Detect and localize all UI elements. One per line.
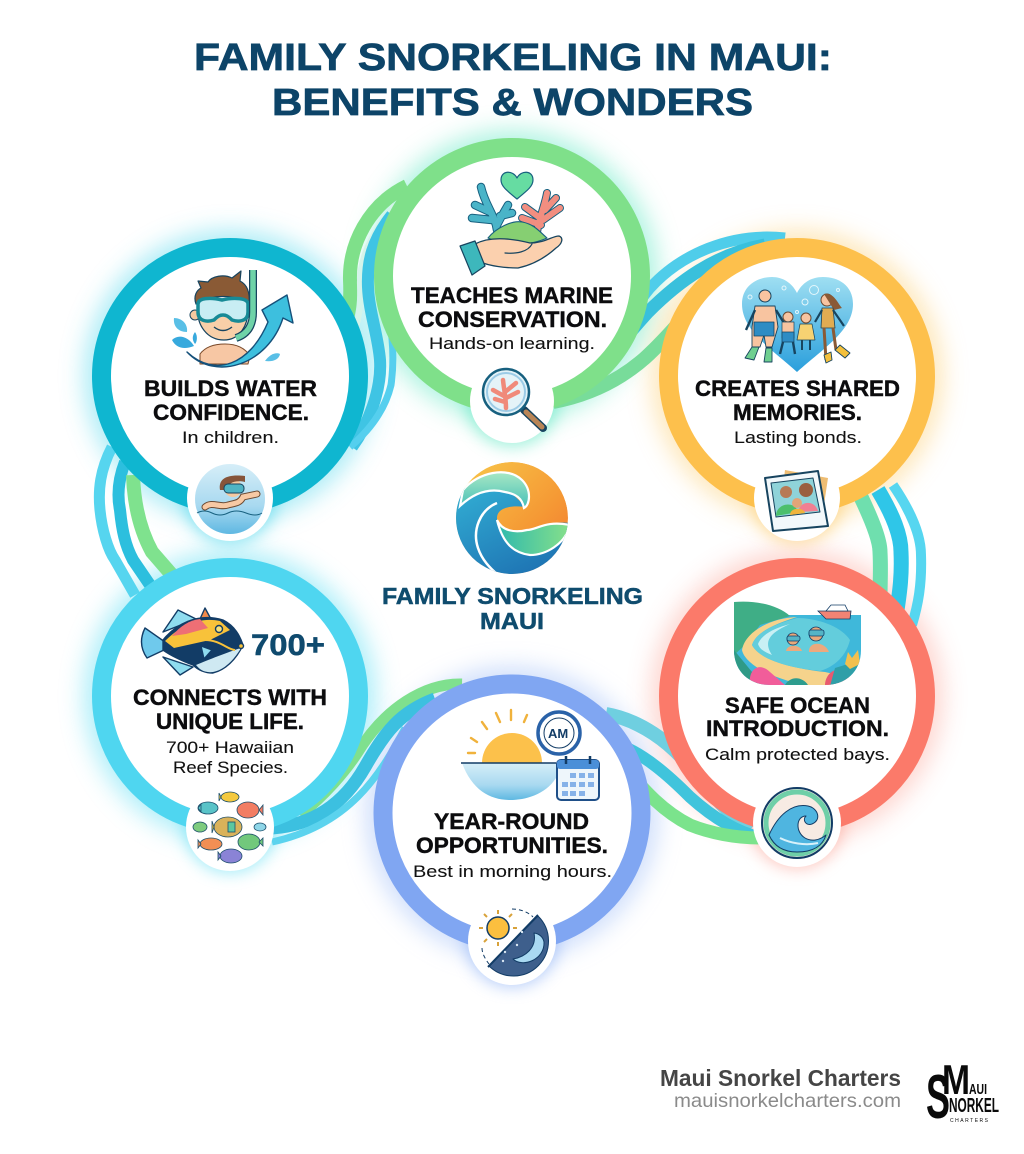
- heading: UNIQUE LIFE.: [156, 709, 304, 734]
- icon: hand holding coral: [460, 172, 562, 275]
- ring: [668, 248, 926, 504]
- ribbons: unique life to confidence: [99, 447, 172, 595]
- subtext: Best in morning hours.: [413, 862, 612, 881]
- footer brand text: Maui Snorkel Charters: [660, 1065, 901, 1091]
- icon: protected bay with snorkelers: [734, 602, 861, 686]
- title: BENEFITS & WONDERS: [272, 82, 753, 124]
- center label: [382, 583, 643, 634]
- badge: family photo: [754, 455, 840, 541]
- center logo: wave and sun: [456, 462, 568, 574]
- heading: CONFIDENCE.: [153, 400, 309, 425]
- footer brand text: mauisnorkelcharters.com: [674, 1090, 901, 1112]
- subtext: Calm protected bays.: [705, 745, 890, 764]
- subtext: Hands-on learning.: [429, 334, 595, 353]
- heading: INTRODUCTION.: [706, 716, 889, 741]
- badge: magnifier over coral: [470, 359, 554, 443]
- heading: YEAR-ROUND: [434, 809, 589, 834]
- center label: MAUI: [480, 608, 544, 634]
- heading: MEMORIES.: [733, 400, 862, 425]
- ribbons: year-round to unique life: [272, 684, 462, 842]
- subtext: Reef Species.: [173, 758, 288, 777]
- footer brand text: [660, 1065, 901, 1112]
- ribbons: ocean introduction to year-round: [606, 714, 762, 838]
- ring: [383, 684, 641, 942]
- ring: [102, 248, 358, 504]
- ribbons: confidence to conservation: [340, 186, 407, 447]
- heading: CONSERVATION.: [418, 307, 607, 332]
- panel: year-round opportunities: [383, 684, 641, 985]
- panel: teaches marine conservation: [384, 148, 640, 443]
- subtext: Lasting bonds.: [734, 428, 862, 447]
- ring: [384, 148, 640, 404]
- heading: CREATES SHARED: [695, 376, 900, 401]
- heading: SAFE OCEAN: [725, 693, 870, 718]
- panel: connects with unique life: [102, 568, 358, 871]
- subtext: In children.: [182, 428, 279, 447]
- glows behind rings: [100, 146, 927, 987]
- ribbons: conservation to memories: [553, 237, 785, 402]
- icon: family in a heart: [742, 277, 853, 372]
- panel: creates shared memories: [668, 248, 926, 541]
- footer logo: M: [942, 1056, 970, 1103]
- badge: swimmer: [187, 455, 273, 541]
- icon: reef triggerfish: [141, 608, 244, 675]
- footer logo: AUI: [969, 1081, 987, 1098]
- stat: 700+: 700+: [251, 629, 325, 662]
- badge: wave emblem: [753, 779, 841, 867]
- ring: [668, 568, 926, 824]
- ring: [102, 568, 358, 824]
- footer logo: [926, 1056, 999, 1132]
- panel: safe ocean introduction: [668, 568, 926, 867]
- panel: builds water confidence: [102, 248, 358, 541]
- icon: snorkeling boy with rising arrow: [172, 270, 293, 367]
- title: [194, 37, 832, 124]
- heading: TEACHES MARINE: [411, 283, 613, 308]
- badge: sun and moon: [468, 897, 556, 985]
- heading: CONNECTS WITH: [133, 685, 327, 710]
- center label: FAMILY SNORKELING: [382, 583, 643, 609]
- heading: BUILDS WATER: [144, 376, 317, 401]
- title: FAMILY SNORKELING IN MAUI:: [194, 37, 832, 79]
- ribbons: memories to ocean introduction: [860, 485, 921, 625]
- icon: morning sun, clock and calendar: [461, 710, 599, 800]
- heading: OPPORTUNITIES.: [416, 833, 608, 858]
- footer logo: CHARTERS: [950, 1118, 989, 1124]
- subtext: 700+ Hawaiian: [166, 738, 294, 757]
- icon: morning sun, clock and calendar: AM: [548, 726, 568, 741]
- footer logo: S: [926, 1063, 950, 1132]
- badge: fish school: [186, 783, 274, 871]
